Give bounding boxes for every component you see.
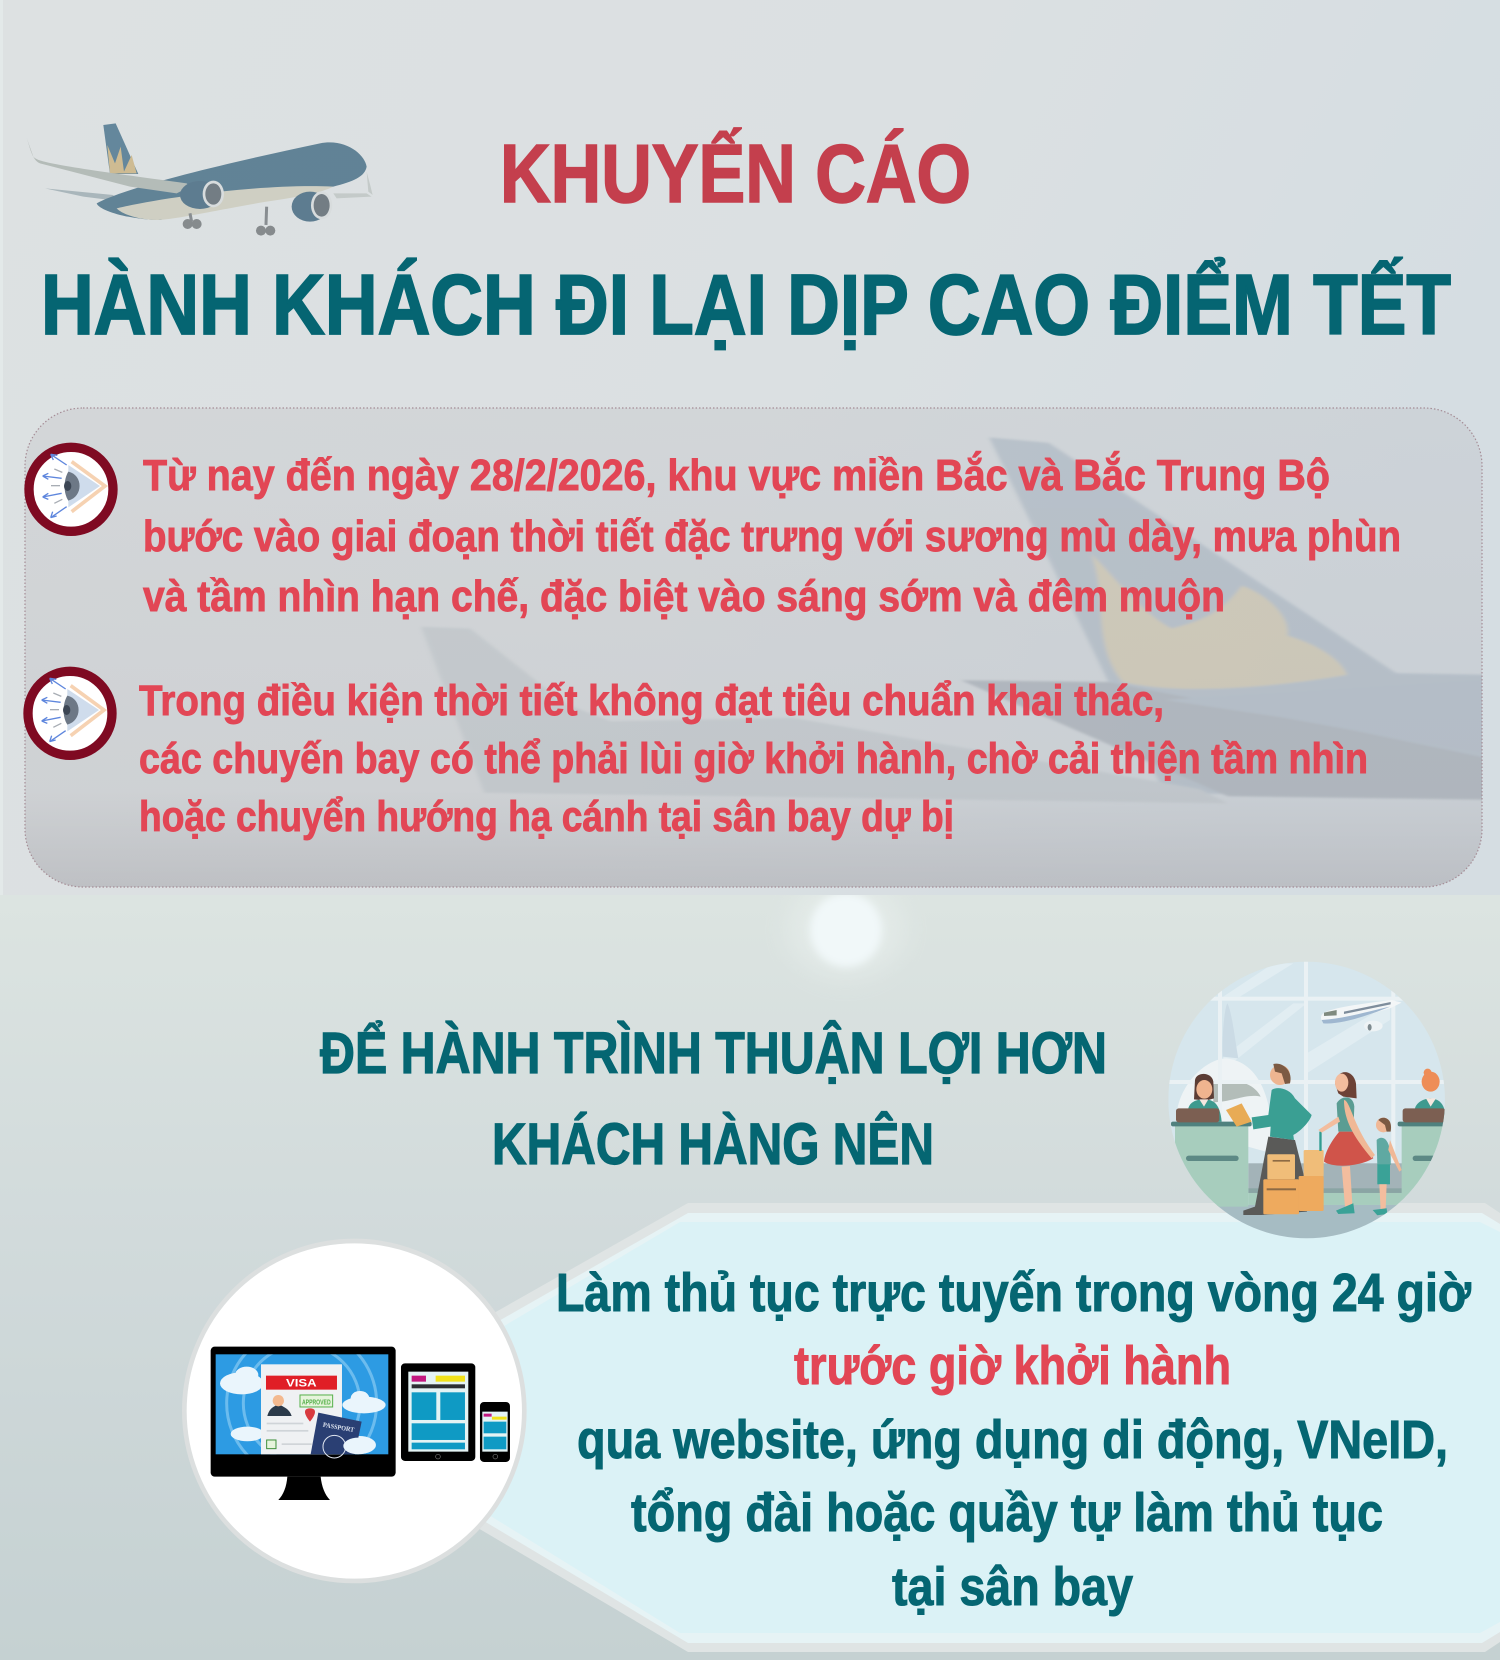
illustration: online check-in devices [184, 1241, 524, 1581]
tail fin [103, 123, 138, 174]
illustration: online check-in devices: VISA [286, 1378, 317, 1390]
warning text 1 [143, 450, 1401, 621]
monitor screen [216, 1354, 388, 1454]
man [1243, 1137, 1312, 1215]
window frame [1168, 962, 1445, 1175]
callout bubble [300, 1203, 1500, 1652]
callout text: tổng đài hoặc quầy tự làm thủ tục [631, 1483, 1383, 1543]
passport [311, 1413, 362, 1454]
background: parked aircraft tails in fog [25, 437, 1500, 887]
warning text 2: Trong điều kiện thời tiết không đạt tiêu chuẩn khai thác, [139, 677, 1164, 725]
title line 1: KHUYẾN CÁO [500, 127, 971, 220]
main wing [26, 136, 190, 193]
panel: weather warning [25, 408, 1482, 887]
child [1376, 1118, 1391, 1132]
illustration: online check-in devices: PASSPORT [322, 1422, 355, 1434]
floor and wall strip [1248, 1163, 1402, 1188]
icon: reduced visibility eye 1 [29, 447, 113, 531]
fuselage [97, 142, 367, 220]
right engine [292, 192, 328, 222]
warning text 1: và tầm nhìn hạn chế, đặc biệt vào sáng sớm và đêm muộn [143, 572, 1225, 621]
tablet [401, 1363, 475, 1461]
distant plane tail [1222, 1003, 1238, 1058]
desks [1175, 1125, 1248, 1207]
callout text: tại sân bay [892, 1557, 1133, 1617]
warning text 2: hoặc chuyển hướng hạ cánh tại sân bay dự bị [139, 793, 954, 841]
left engine [180, 181, 220, 209]
far wing [333, 193, 372, 198]
visa document [261, 1364, 342, 1454]
left agent [1188, 1099, 1222, 1122]
background: upper fog section [0, 0, 1500, 895]
callout text: trước giờ khởi hành [794, 1336, 1231, 1396]
section heading: ĐỂ HÀNH TRÌNH THUẬN LỢI HƠN [320, 1021, 1107, 1086]
woman [1335, 1072, 1357, 1098]
monitor [211, 1347, 396, 1477]
landing gear [190, 207, 267, 225]
window background [1168, 962, 1445, 1164]
rear stabilizer [45, 188, 115, 201]
background: sun glow in fog [803, 895, 890, 972]
parked plane body [1177, 1058, 1272, 1153]
plane photo top left [26, 123, 373, 236]
phone [480, 1402, 510, 1462]
window reflections [1223, 963, 1390, 1073]
warning text 2 [139, 677, 1368, 841]
right agent [1415, 1098, 1447, 1122]
illustration: online check-in devices: APPROVED [302, 1398, 331, 1407]
background: lower fog section [0, 895, 1500, 1660]
section heading [320, 1021, 1107, 1177]
section heading: KHÁCH HÀNG NÊN [492, 1112, 934, 1177]
icon: reduced visibility eye 2 [28, 671, 112, 755]
white circle [184, 1241, 524, 1581]
luggage [1267, 1154, 1295, 1179]
boarding pass [1226, 1103, 1252, 1127]
background: upper section left edge highlight [0, 0, 3, 895]
illustration: airport check-in [1168, 962, 1448, 1242]
callout text [556, 1263, 1472, 1617]
warning text 1: Từ nay đến ngày 28/2/2026, khu vực miền Bắc và Bắc Trung Bộ [143, 450, 1330, 500]
flying plane [1321, 1000, 1402, 1020]
